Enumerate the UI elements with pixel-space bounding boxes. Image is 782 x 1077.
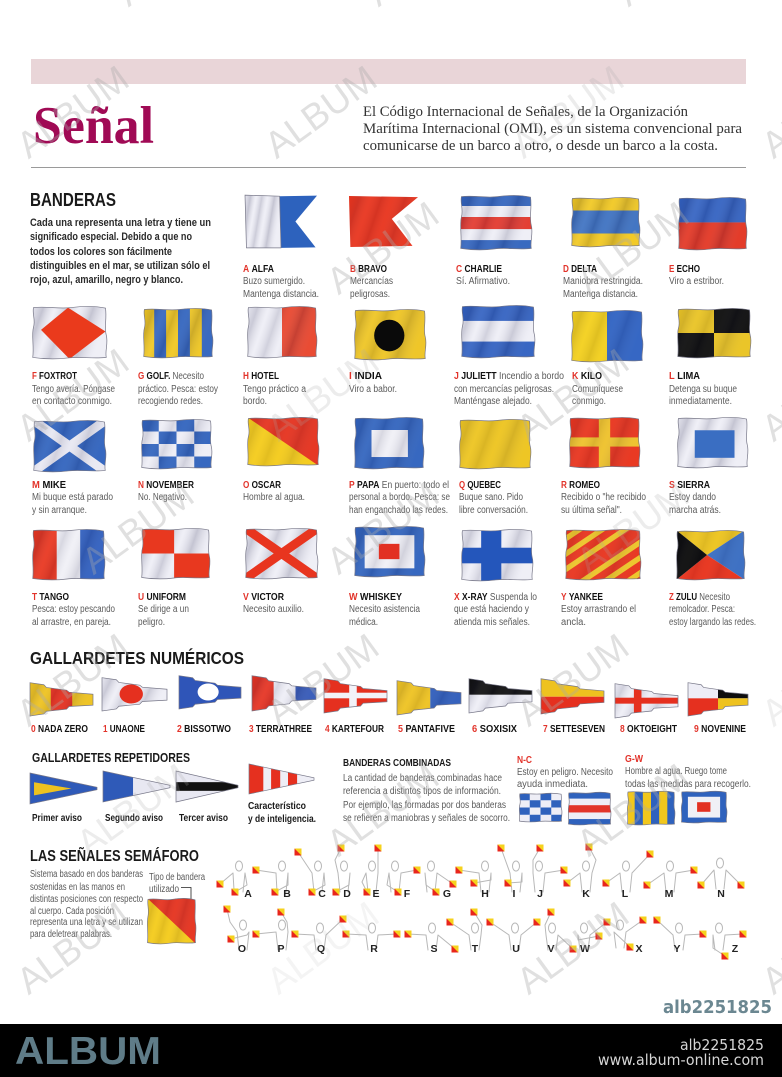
flag P: P PAPA En puerto: todo el <box>349 480 449 491</box>
flag S: Estoy dando <box>669 492 716 503</box>
flag A: A ALFA <box>243 264 274 275</box>
semaphore Z <box>713 923 746 960</box>
flag Y <box>561 529 642 625</box>
footer credit <box>598 1036 764 1069</box>
semaphore S <box>404 923 458 955</box>
flag X: X X-RAY Suspenda lo <box>454 592 537 603</box>
watermarks: ALBUM <box>569 756 696 864</box>
semaphore description <box>30 869 143 940</box>
flag F: F FOXTROT <box>32 371 77 382</box>
watermarks: ALBUM <box>257 58 384 166</box>
pennant 8: 8 OKTOEIGHT <box>620 724 677 735</box>
flag V <box>243 528 318 615</box>
panel: banderas combinadas: BANDERAS COMBINADAS <box>343 757 451 769</box>
banderas intro text <box>30 217 211 286</box>
watermarks: ALBUM <box>569 194 696 302</box>
semaphore N <box>698 858 744 900</box>
repeater: caracteristico: Característico <box>248 800 306 812</box>
watermarks: ALBUM <box>9 58 136 166</box>
flag G: práctico. Pesca: estoy <box>138 384 218 395</box>
repeater: caracteristico <box>248 764 316 825</box>
footer band <box>0 1024 782 1077</box>
flag M: Mi buque está parado <box>32 492 113 503</box>
semaphore L: L <box>622 888 629 900</box>
semaphore T: T <box>472 943 479 955</box>
semaphore I <box>498 844 522 900</box>
pennant 7 <box>541 678 605 735</box>
flag N: N NOVEMBER <box>138 480 195 491</box>
flag P: han enganchado las redes. <box>349 505 448 516</box>
flag D: Maniobra restringida. <box>563 276 643 287</box>
semaphore U: U <box>512 943 520 955</box>
flag L: L LIMA <box>669 371 700 382</box>
combination G-W: todas las medidas para recogerlo. <box>625 779 751 790</box>
semaphore R <box>342 923 400 955</box>
flag D: D DELTA <box>563 264 597 275</box>
heading: banderas: BANDERAS <box>30 190 116 210</box>
flag J: J JULIETT Incendio a bordo <box>454 371 564 382</box>
flag A: Mantenga distancia. <box>243 289 319 300</box>
watermarks: ALBUM <box>9 626 136 734</box>
flag S <box>669 417 748 516</box>
semaphore U <box>486 918 540 955</box>
watermarks: ALBUM <box>509 894 636 1002</box>
watermarks: ALBUM <box>259 894 386 1002</box>
flag K <box>571 310 643 407</box>
flag I: I INDIA <box>349 371 382 382</box>
semaphore A: A <box>244 888 252 900</box>
flag Q: libre conversación. <box>459 505 528 516</box>
semaphore V: V <box>547 943 555 955</box>
flag T <box>32 529 115 628</box>
flag P: personal a bordo. Pesca: se <box>349 492 450 503</box>
combination G-W: Hombre al agua. Ruego tome <box>625 766 727 777</box>
flag T: Pesca: estoy pescando <box>32 604 115 615</box>
flag U: Se dirige a un <box>138 604 189 615</box>
flag H <box>243 306 317 407</box>
semaphore V <box>545 908 576 955</box>
combination N-C: Estoy en peligro. Necesito <box>517 767 613 778</box>
flag Q: Buque sano. Pido <box>459 492 523 503</box>
flag B: peligrosas. <box>350 289 390 300</box>
flag O <box>243 417 319 503</box>
semaphore D: D <box>343 888 351 900</box>
watermarks: ALBUM <box>259 341 386 449</box>
semaphore Q: Q <box>317 943 325 955</box>
combination G-W <box>625 754 751 825</box>
flag V: V VICTOR <box>243 592 285 603</box>
flag Q <box>459 419 531 516</box>
flag R: Recibido o "he recibido <box>561 492 646 503</box>
panel: banderas combinadas: se refieren a maniobras y señales de socorro. <box>343 813 510 824</box>
semaphore K <box>564 844 596 900</box>
flag L: inmediatamente. <box>669 396 732 407</box>
semaphore X: X <box>635 943 643 955</box>
semaphore P <box>252 908 288 955</box>
flag G: G GOLF. Necesito <box>138 371 204 382</box>
footer credit: alb2251825 <box>680 1036 764 1054</box>
panel: banderas combinadas <box>343 757 510 824</box>
flag B <box>349 196 418 300</box>
repeater: caracteristico: y de inteligencia. <box>248 813 316 825</box>
flag H: Tengo práctico a <box>243 384 306 395</box>
flag G: recogiendo redes. <box>138 396 203 407</box>
flag C: C CHARLIE <box>456 264 502 275</box>
pennant 6 <box>469 678 532 735</box>
footer logo: ALBUM <box>15 1030 161 1073</box>
semaphore H <box>456 861 491 900</box>
watermarks: ALBUM <box>74 474 201 582</box>
flag I: Viro a babor. <box>349 384 397 395</box>
flag K: conmigo. <box>572 396 606 407</box>
flag F <box>32 306 115 407</box>
watermarks: ALBUM <box>509 341 636 449</box>
semaphore M <box>644 861 698 900</box>
flag Z: estoy largando las redes. <box>669 617 756 628</box>
flag Y: Y YANKEE <box>561 592 603 603</box>
flag E: E ECHO <box>669 264 700 275</box>
watermarks: ALBUM <box>259 626 386 734</box>
flag R <box>561 417 646 516</box>
semaphore F <box>387 861 420 900</box>
semaphore H: H <box>481 888 489 900</box>
flag S: S SIERRA <box>669 480 710 491</box>
combination N-C: N-C <box>517 755 532 766</box>
flag Q: Q QUEBEC <box>459 480 501 491</box>
watermarks: ALBUM <box>504 58 631 166</box>
semaphore X <box>614 916 646 955</box>
callout: flag type used <box>147 872 205 944</box>
image id stamp: alb2251825 <box>663 997 772 1018</box>
pennant 0: 0 NADA ZERO <box>31 724 88 735</box>
semaphore B: B <box>283 888 291 900</box>
header band <box>31 59 746 84</box>
pennant 7: 7 SETTESEVEN <box>543 724 605 735</box>
repeater: primer aviso <box>30 773 97 824</box>
pennant 5: 5 PANTAFIVE <box>398 724 455 735</box>
flag B: B BRAVO <box>350 264 387 275</box>
flag D: Mantenga distancia. <box>563 289 638 300</box>
flag C: Sí. Afirmativo. <box>456 276 510 287</box>
pennant 8 <box>615 683 678 735</box>
flag O: Hombre al agua. <box>243 492 305 503</box>
flag F: Tengo avería. Póngase <box>32 384 115 395</box>
flag J <box>454 305 564 407</box>
panel: banderas combinadas: referencia a distintos tipos de información. <box>343 786 501 797</box>
semaphore Q <box>292 916 346 955</box>
watermarks: ALBUM <box>319 474 446 582</box>
flag B: Mercancías <box>350 276 393 287</box>
semaphore O: O <box>238 943 246 955</box>
repeater: segundo aviso: Segundo aviso <box>105 812 163 824</box>
semaphore N: N <box>717 888 725 900</box>
semaphore description: distintas posiciones con respecto <box>30 894 143 905</box>
combination G-W: G-W <box>625 754 643 765</box>
flag Z <box>669 530 756 628</box>
semaphore I: I <box>513 888 516 900</box>
heading: gallardetes numericos: GALLARDETES NUMÉRICOS <box>30 647 244 668</box>
flag M <box>32 420 113 516</box>
panel: banderas combinadas: Por ejemplo, las formadas por dos banderas <box>343 800 506 811</box>
combination N-C <box>517 755 613 825</box>
flag Z: remolcador. Pesca: <box>669 604 735 615</box>
flag R: R ROMEO <box>561 480 600 491</box>
heading: las senales semaforo: LAS SEÑALES SEMÁFORO <box>30 845 199 865</box>
semaphore B <box>252 861 291 900</box>
callout: flag type used: utilizado <box>149 884 179 895</box>
flag C <box>456 195 532 287</box>
banderas intro text: rojo, azul, amarillo, negro y blanco. <box>30 274 183 286</box>
pennant 2: 2 BISSOTWO <box>177 724 231 735</box>
flag W: W WHISKEY <box>349 592 402 603</box>
banderas intro text: todos los colores son fácilmente <box>30 246 172 258</box>
watermarks: ALBUM <box>9 894 136 1002</box>
pennant 9: 9 NOVENINE <box>694 724 746 735</box>
semaphore description: para deletrear palabras. <box>30 929 112 940</box>
semaphore Y <box>654 916 706 955</box>
semaphore W <box>578 918 610 955</box>
callout: flag type used: Tipo de bandera <box>149 872 205 883</box>
watermarks: ALBUM <box>509 626 636 734</box>
combination N-C: ayuda inmediata. <box>517 779 588 790</box>
flag U: U UNIFORM <box>138 592 186 603</box>
semaphore K: K <box>582 888 590 900</box>
flag A <box>243 195 319 300</box>
flag H: H HOTEL <box>243 371 279 382</box>
repeater: tercer aviso <box>176 771 238 824</box>
flag U <box>138 528 210 628</box>
heading: gallardetes repetidores: GALLARDETES REPETIDORES <box>32 750 190 765</box>
flag M: y sin arranque. <box>32 505 87 516</box>
title: Señal <box>33 97 154 155</box>
intro text: comunicarse de un barco a otro, o desde un barco a la costa. <box>363 138 718 154</box>
watermarks: ALBUM <box>319 756 446 864</box>
semaphore description: al cuerpo. Cada posición <box>30 906 114 917</box>
footer credit: www.album-online.com <box>598 1051 764 1069</box>
semaphore O <box>224 906 249 955</box>
watermarks: ALBUM <box>319 194 446 302</box>
flag E <box>669 197 747 287</box>
flag O: O OSCAR <box>243 480 282 491</box>
semaphore Z: Z <box>732 943 739 955</box>
repeater: segundo aviso <box>103 771 170 824</box>
pennant 3 <box>249 675 316 735</box>
semaphore J <box>533 844 568 900</box>
semaphore G: G <box>443 888 451 900</box>
semaphore M: M <box>665 888 674 900</box>
flag T: T TANGO <box>32 592 69 603</box>
panel: banderas combinadas: La cantidad de banderas combinadas hace <box>343 773 502 784</box>
flag W: Necesito asistencia <box>349 604 420 615</box>
flag M: M MIKE <box>32 480 66 491</box>
flag L: Detenga su buque <box>669 384 737 395</box>
banderas intro text: distinguibles en el mar, se utilizan sólo el <box>30 260 210 272</box>
semaphore D <box>332 844 351 900</box>
flag P <box>349 417 450 516</box>
semaphore C: C <box>318 888 326 900</box>
flag Y: ancla. <box>561 617 586 628</box>
watermarks: ALBUM <box>569 474 696 582</box>
pennant 5 <box>397 680 461 735</box>
flag X <box>454 529 537 628</box>
flag I <box>349 309 426 395</box>
flag W <box>349 526 425 628</box>
flag J: con mercancías peligrosas. <box>454 384 554 395</box>
flag U: peligro. <box>138 617 165 628</box>
pennant 0 <box>30 682 93 735</box>
semaphore F: F <box>404 888 411 900</box>
semaphore L <box>602 850 654 900</box>
semaphore T <box>446 908 482 955</box>
flag R: su última señal". <box>561 505 622 516</box>
flag T: al arrastre, en pareja. <box>32 617 111 628</box>
banderas intro text: significado especial. Debido a que no <box>30 231 192 243</box>
flag D <box>563 197 643 300</box>
semaphore S: S <box>430 943 438 955</box>
flag Y: Estoy arrastrando el <box>561 604 636 615</box>
flag X: que está haciendo y <box>454 604 529 615</box>
flag F: en contacto conmigo. <box>32 396 112 407</box>
repeater: primer aviso: Primer aviso <box>32 812 82 824</box>
flag J: Manténgase alejado. <box>454 396 532 407</box>
watermarks: ALBUM <box>69 756 196 864</box>
flag S: marcha atrás. <box>669 505 721 516</box>
repeater: tercer aviso: Tercer aviso <box>179 812 228 824</box>
semaphore E <box>362 844 382 900</box>
semaphore description: Sistema basado en dos banderas <box>30 869 143 880</box>
pennant 2 <box>177 675 241 735</box>
pennant 9 <box>688 682 748 735</box>
banderas intro text: Cada una representa una letra y tiene un <box>30 217 211 229</box>
flag Z: Z ZULU Necesito <box>669 592 730 603</box>
flag K: K KILO <box>572 371 602 382</box>
pennant 6: 6 SOXISIX <box>472 724 517 735</box>
flag N: No. Negativo. <box>138 492 187 503</box>
flag H: bordo. <box>243 396 267 407</box>
semaphore C <box>294 848 326 900</box>
semaphore W: W <box>580 943 590 955</box>
flag K: Comuníquese <box>572 384 623 395</box>
intro text: Marítima Internacional (OMI), es un sistema convencional para <box>363 121 743 137</box>
flag W: médica. <box>349 617 378 628</box>
pennant 1 <box>102 677 167 735</box>
flag N <box>138 419 212 503</box>
pennant 3: 3 TERRATHREE <box>249 724 312 735</box>
pennant 1: 1 UNAONE <box>103 724 145 735</box>
flag A: Buzo sumergido. <box>243 276 305 287</box>
flag L <box>669 308 751 407</box>
intro text <box>363 104 743 154</box>
semaphore description: sostenidas en las manos en <box>30 882 125 893</box>
pennant 4: 4 KARTEFOUR <box>325 724 385 735</box>
semaphore J: J <box>537 888 543 900</box>
semaphore description: representa una letra y se utilizan <box>30 917 143 928</box>
flag G <box>138 308 218 407</box>
pennant 4 <box>324 678 387 735</box>
semaphore A <box>216 861 252 900</box>
watermarks: ALBUM <box>9 341 136 449</box>
flag V: Necesito auxilio. <box>243 604 304 615</box>
semaphore P: P <box>277 943 285 955</box>
semaphore G <box>425 861 456 900</box>
intro text: El Código Internacional de Señales, de la Organización <box>363 104 689 120</box>
flag X: atienda mis señales. <box>454 617 530 628</box>
semaphore Y: Y <box>673 943 681 955</box>
semaphore E: E <box>372 888 380 900</box>
flag E: Viro a estribor. <box>669 276 724 287</box>
semaphore R: R <box>370 943 378 955</box>
